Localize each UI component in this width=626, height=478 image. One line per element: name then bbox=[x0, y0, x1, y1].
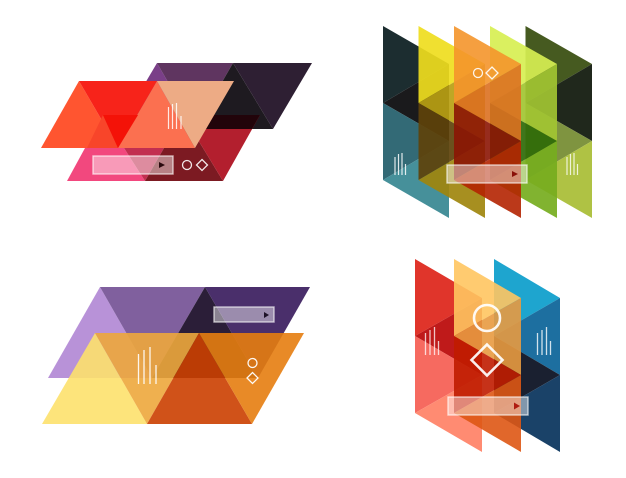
bar chart icon right bbox=[538, 327, 550, 355]
strip 3 orange bbox=[454, 26, 521, 218]
strip 4 lime bbox=[490, 26, 557, 218]
strip 3 blue bbox=[494, 259, 560, 452]
back purple parallelogram bbox=[48, 287, 310, 378]
back purple parallelogram bbox=[118, 63, 312, 129]
icons: circle and diamond bbox=[182, 160, 208, 170]
label bar with play arrow bbox=[448, 397, 528, 415]
bottom crimson parallelogram bbox=[67, 115, 260, 181]
front red parallelogram bbox=[41, 81, 234, 148]
front amber parallelogram bbox=[42, 333, 304, 424]
icons: circle and diamond bbox=[247, 358, 258, 384]
bar chart icon bbox=[168, 103, 181, 129]
icon: large diamond bbox=[472, 344, 502, 376]
panel: purple and amber horizontal banner bbox=[42, 287, 310, 424]
bar chart icon left bbox=[426, 327, 438, 355]
bar chart icon right bbox=[567, 153, 578, 175]
label bar with play arrow bbox=[93, 156, 173, 174]
bar chart icon bbox=[138, 347, 156, 384]
icons: circle and diamond bbox=[474, 67, 498, 79]
strip 1 teal bbox=[383, 26, 449, 218]
panel: red and purple horizontal banner bbox=[41, 63, 312, 181]
panel: five vertical strips, top right bbox=[383, 26, 592, 218]
label bar with play arrow bbox=[214, 307, 274, 322]
label bar with play arrow bbox=[447, 165, 527, 183]
bar chart icon left bbox=[395, 153, 406, 175]
strip 5 olive bbox=[526, 26, 592, 218]
panel: three vertical strips, bottom right bbox=[415, 259, 560, 452]
strip 1 red bbox=[415, 259, 482, 452]
strip 2 amber bbox=[454, 259, 521, 452]
icon: large circle bbox=[474, 305, 500, 331]
strip 2 yellow bbox=[418, 26, 485, 218]
